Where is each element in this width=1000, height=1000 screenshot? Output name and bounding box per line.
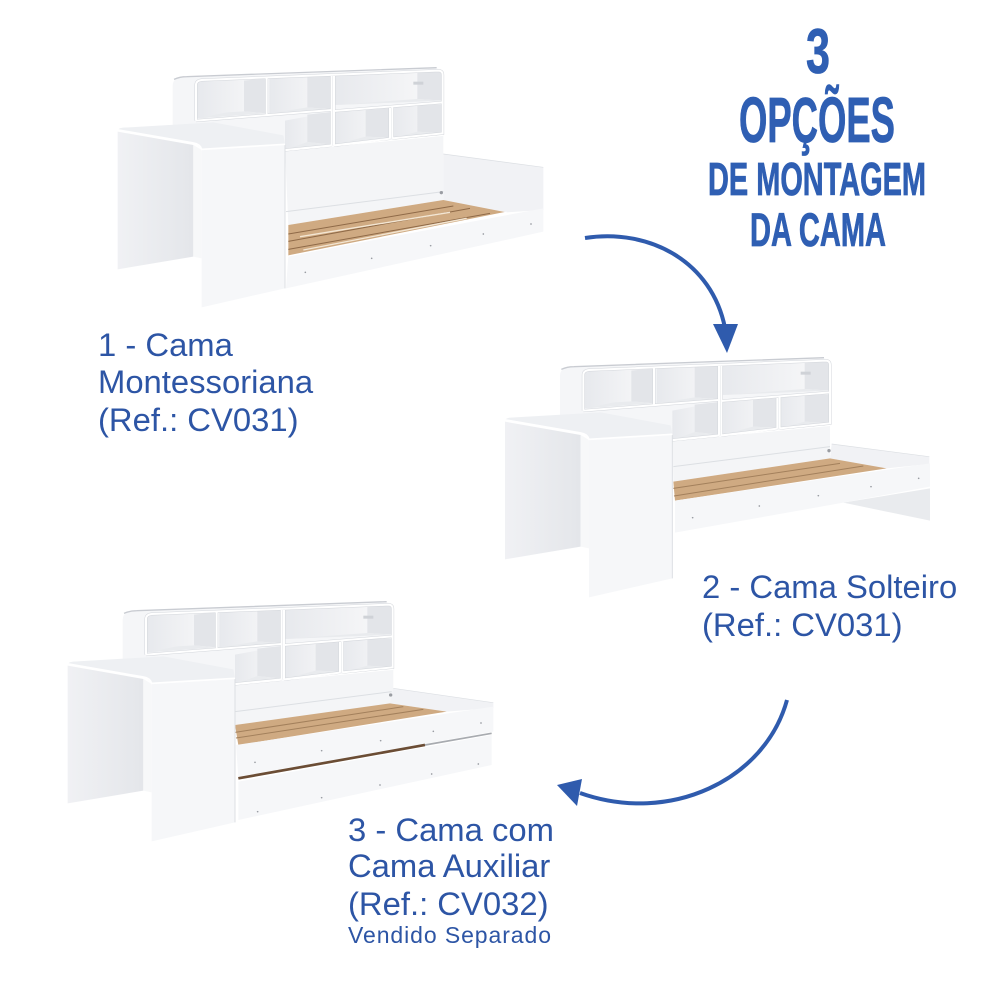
title: DA CAMA	[750, 203, 886, 256]
title	[708, 17, 926, 256]
bed 1: montessoriana	[118, 68, 543, 307]
label 3: 3 - Cama com	[348, 811, 554, 848]
label 2: (Ref.: CV031)	[702, 606, 902, 643]
arrow: bed 1 to bed 2	[585, 236, 738, 353]
label 1: Montessoriana	[98, 363, 314, 400]
label 3: Vendido Separado	[348, 922, 551, 948]
label 3: (Ref.: CV032)	[348, 885, 548, 922]
label 1: 1 - Cama	[98, 326, 234, 363]
label 2: 2 - Cama Solteiro	[702, 568, 957, 605]
label 2	[702, 568, 957, 643]
bed 3: cama auxiliar	[68, 602, 493, 841]
label 3	[348, 811, 554, 948]
label 1	[98, 326, 314, 438]
label 1: (Ref.: CV031)	[98, 401, 298, 438]
arrow: bed 2 to bed 3	[557, 700, 787, 806]
bed 2: solteiro	[505, 358, 930, 597]
label 3: Cama Auxiliar	[348, 847, 550, 884]
title: 3	[806, 17, 830, 87]
